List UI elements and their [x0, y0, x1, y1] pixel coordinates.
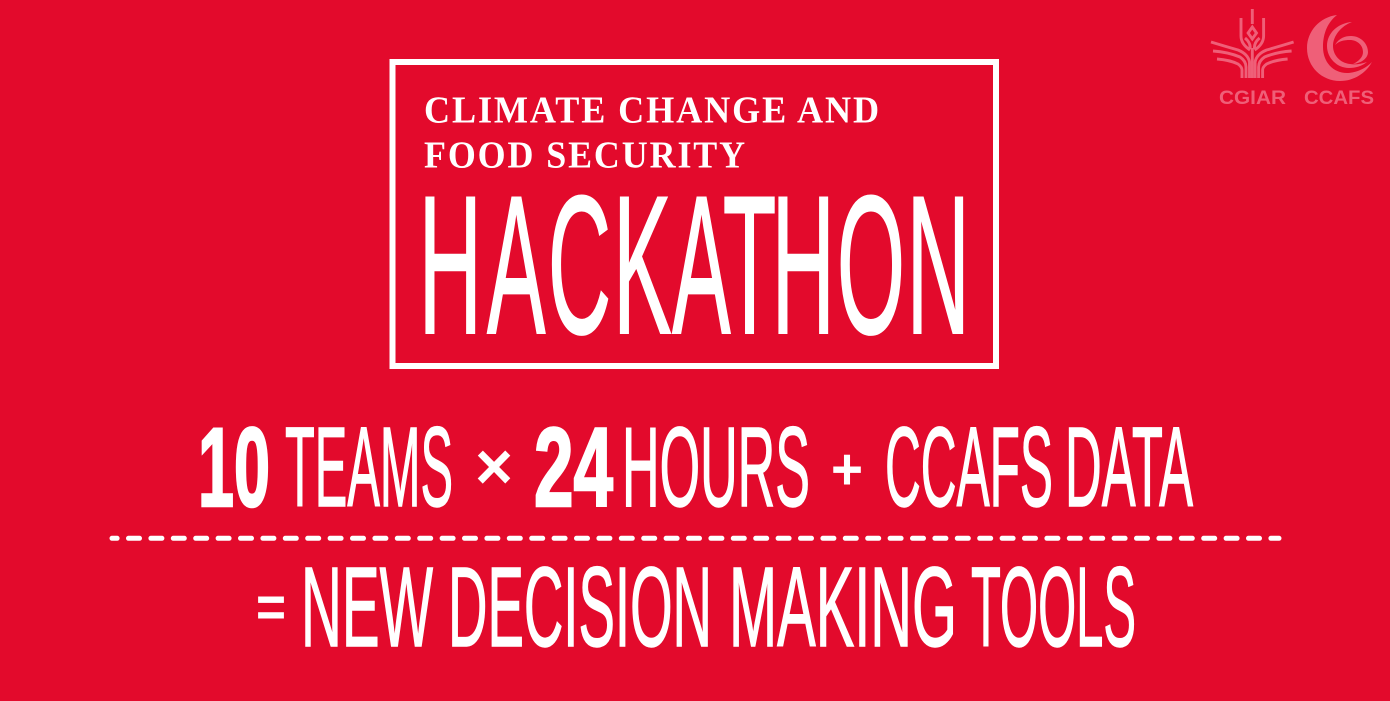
title: hackathon: HACKATHON: [419, 156, 970, 376]
subtitle: [424, 90, 881, 176]
icon: swirl: [1307, 15, 1372, 81]
result line: =: [256, 575, 286, 640]
title frame: [392, 62, 996, 366]
plus sign: +: [831, 437, 863, 502]
equation line: 24: [534, 405, 613, 530]
icon: wheat and wings: [1211, 9, 1294, 78]
equation line: 10: [198, 405, 270, 530]
equation line: HOURS: [622, 404, 810, 530]
logo: CGIAR: [1211, 9, 1294, 109]
subtitle: CLIMATE CHANGE AND: [424, 90, 881, 132]
dashed divider: [112, 536, 1279, 541]
result line: MAKING: [729, 544, 957, 670]
result line: DECISION: [448, 544, 712, 670]
equation line: CCAFS: [885, 404, 1053, 530]
CGIAR label: CGIAR: [1219, 87, 1286, 109]
equation line: TEAMS: [285, 404, 453, 530]
result line: NEW: [301, 544, 433, 670]
text: TOOLS: [971, 544, 1136, 670]
logo: CCAFS: [1304, 15, 1374, 109]
CCAFS label: CCAFS: [1304, 87, 1374, 109]
multiply sign: ×: [475, 429, 513, 503]
result line: [256, 544, 1136, 670]
subtitle: FOOD SECURITY: [424, 134, 747, 176]
title panel: [392, 62, 996, 376]
equation line: [198, 404, 1193, 530]
text: DATA: [1065, 404, 1193, 530]
